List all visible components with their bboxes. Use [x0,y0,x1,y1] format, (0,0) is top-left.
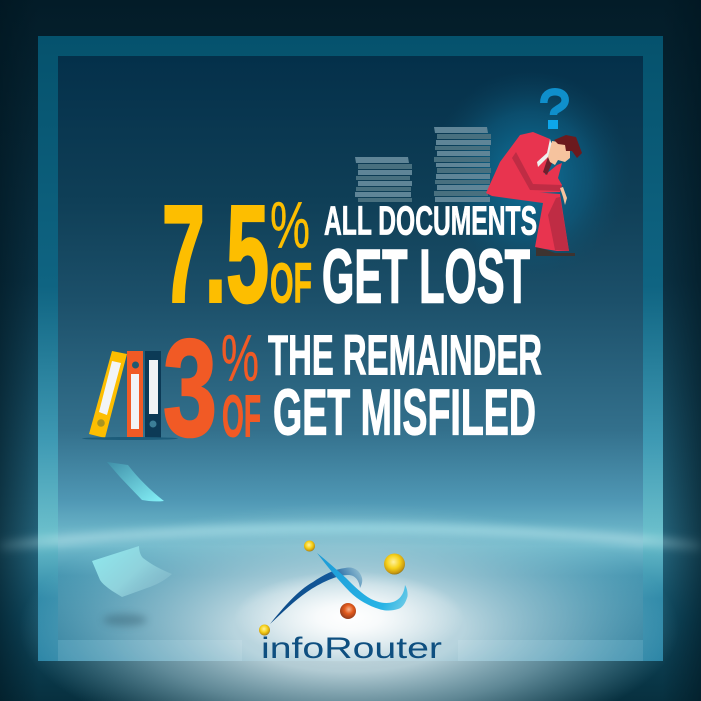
icon: paper stack small [355,157,412,202]
icon: falling paper small [107,462,164,501]
shirt collar [537,139,552,167]
legs [492,192,569,251]
shoes [536,247,575,256]
jacket [486,132,562,196]
headline: 7.5% [162,178,312,332]
logo yellow ball large [384,554,405,574]
logo light swoosh [317,553,408,610]
7.5 number: 7.5 [162,178,269,332]
hand [560,187,567,205]
infographic canvas: OF [222,384,261,450]
logo yellow ball bottom [259,624,270,636]
percent sign: % [270,188,310,262]
icon: stressed man in red suit [486,132,582,256]
jacket fold [512,152,562,191]
paper shadow [103,614,147,626]
icon: question mark [544,92,565,129]
of: OF [270,252,312,316]
binder shelf shadow [82,437,178,440]
logo: infoRouter [259,540,442,665]
icon: ring binder yellow [89,351,127,438]
headline: 3% [163,312,261,466]
text: all documents: ALL DOCUMENTS [324,198,537,244]
logo orange ball [340,603,356,619]
logo yellow ball top [304,540,315,552]
tie [543,157,552,175]
icon: ring binder orange [127,351,143,438]
face [548,141,570,165]
hair [554,135,582,158]
icon: paper stack tall [434,127,491,202]
3 number: 3 [163,312,217,466]
logo dark swoosh [270,567,362,624]
icon: falling paper large [92,546,172,597]
percent sign: % [221,320,259,394]
logo wordmark: infoRouter [261,632,442,665]
icon: ring binder navy [145,351,161,438]
text: get lost: GET LOST [322,234,530,319]
